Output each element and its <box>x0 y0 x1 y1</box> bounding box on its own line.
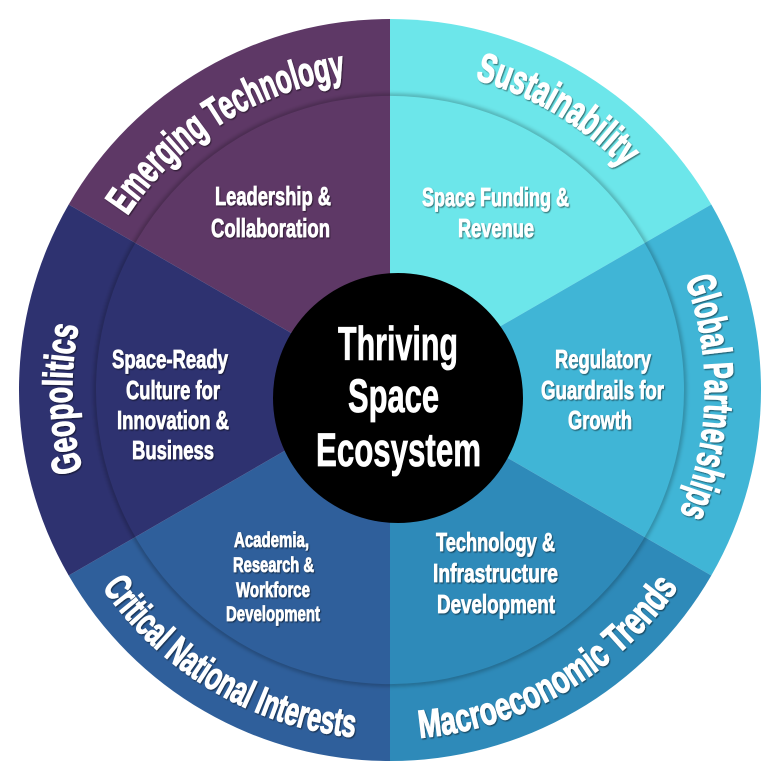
inner ring shadow <box>96 96 684 684</box>
text: Space Funding and Revenue <box>422 182 569 243</box>
inner labels <box>112 181 664 626</box>
text: Academia, Research and Workforce Development <box>226 529 320 626</box>
text: Leadership and Collaboration: Collaboration <box>211 213 330 243</box>
text: Space-Ready Culture for Innovation and Business: Culture for <box>126 375 220 405</box>
label: Emerging Technology: Emerging Technology <box>104 56 344 216</box>
text: Technology and Infrastructure Development: Development <box>437 589 555 619</box>
label: Sustainability: Sustainability <box>477 53 641 170</box>
text: Technology and Infrastructure Development: Infrastructure <box>433 558 558 588</box>
label: Critical National Interests: Critical National Interests <box>105 576 357 740</box>
text: Regulatory Guardrails for Growth: Growth <box>568 405 632 435</box>
text: Regulatory Guardrails for Growth: Regulatory <box>555 344 651 374</box>
sector: Emerging Technology <box>69 19 390 390</box>
text: Technology and Infrastructure Development: Technology & <box>436 527 555 557</box>
label: Global Partnerships: Global Partnerships <box>680 274 735 522</box>
sector: Global Partnerships <box>390 204 761 576</box>
text: Technology and Infrastructure Development <box>433 527 558 619</box>
text: Space-Ready Culture for Innovation and Business: Business <box>132 435 214 465</box>
label: Macroeconomic Trends: Macroeconomic Trends <box>418 578 678 740</box>
text: Academia, Research and Workforce Development: Research & <box>233 554 314 577</box>
hub title <box>316 317 481 476</box>
sector: Macroeconomic Trends <box>390 390 711 761</box>
hub title: Ecosystem <box>316 423 481 476</box>
text: Space Funding and Revenue: Revenue <box>458 213 534 243</box>
sector: Geopolitics <box>19 204 390 576</box>
hub title: Space <box>348 369 439 422</box>
sector: Critical National Interests <box>69 390 390 761</box>
text: Space-Ready Culture for Innovation and Business: Innovation & <box>117 405 229 435</box>
text: Space-Ready Culture for Innovation and Business: Space-Ready <box>112 344 228 374</box>
text: Leadership and Collaboration <box>211 181 331 243</box>
text: Space Funding and Revenue: Space Funding & <box>422 182 569 212</box>
center hub <box>273 273 523 523</box>
text: Space-Ready Culture for Innovation and Business <box>112 344 229 465</box>
text: Regulatory Guardrails for Growth: Guardrails for <box>541 375 664 405</box>
text: Academia, Research and Workforce Development: Development <box>226 603 320 626</box>
text: Academia, Research and Workforce Development: Workforce <box>236 579 310 602</box>
label: Geopolitics: Geopolitics <box>42 324 84 476</box>
text: Academia, Research and Workforce Development: Academia, <box>234 529 309 552</box>
hub title: Thriving <box>338 317 458 370</box>
text: Regulatory Guardrails for Growth <box>541 344 664 435</box>
sector: Sustainability <box>390 19 711 390</box>
hub circle <box>273 273 523 523</box>
text: Leadership and Collaboration: Leadership & <box>215 181 331 211</box>
